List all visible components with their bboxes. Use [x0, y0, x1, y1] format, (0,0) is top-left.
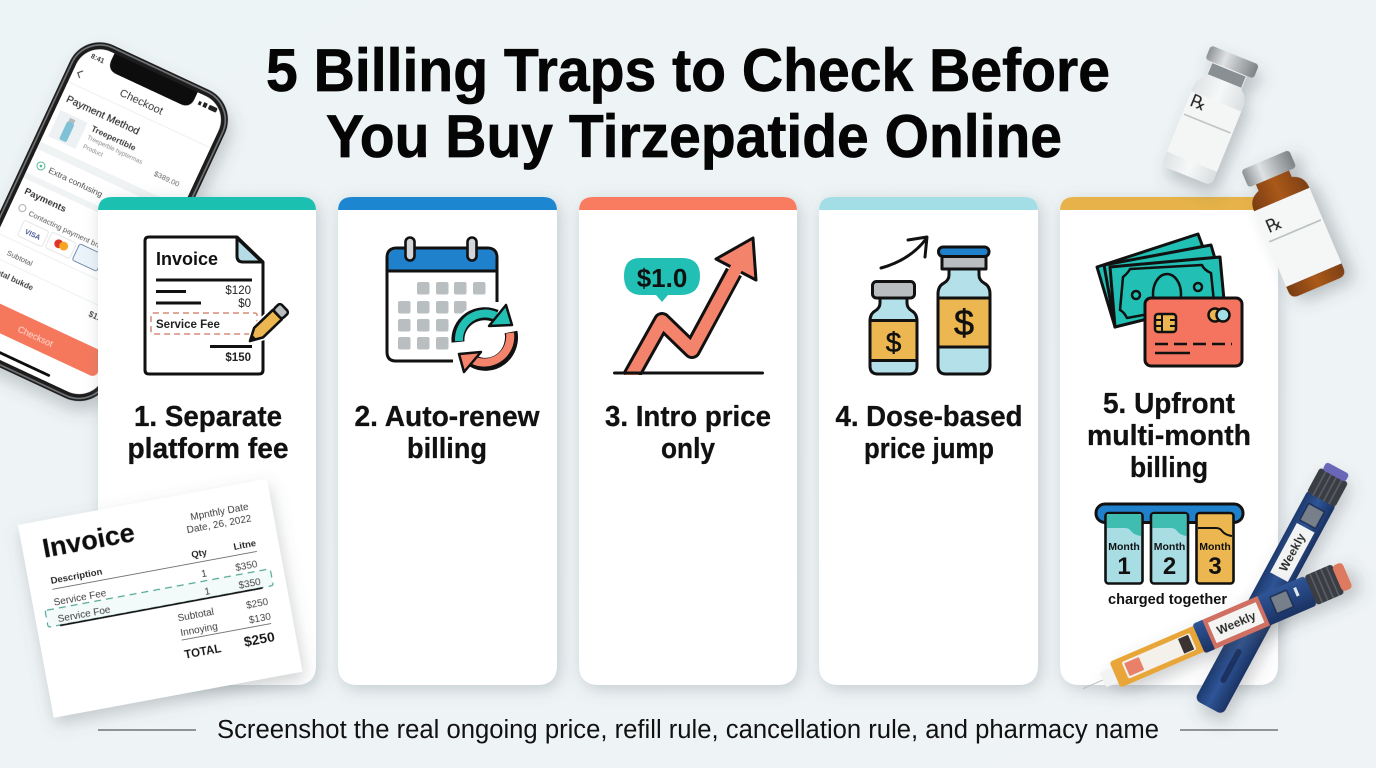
footer note: Screenshot the real ongoing price, refill rule, cancellation rule, and pharmacy name — [217, 716, 1159, 744]
heading: card 3: only — [661, 433, 715, 465]
icon: invoice with pencil: $120 — [225, 285, 251, 297]
heading: card 4: price jump — [864, 433, 994, 465]
phone: checkout screen: Contacting payment brands — [27, 209, 114, 256]
icon: three months charged together — [1096, 504, 1243, 608]
month 2: 2 — [1163, 553, 1176, 580]
vial: clear Rx: ℞ — [1187, 90, 1210, 115]
phone: checkout screen: Payments — [23, 186, 68, 215]
icon: small and large vials — [870, 237, 990, 374]
large vial: $ — [954, 302, 974, 343]
invoice paper — [18, 479, 302, 718]
heading: card 1: platform fee — [128, 433, 288, 465]
pen label: Weekly — [1215, 608, 1258, 638]
title: You Buy Tirzepatide Online — [326, 103, 1062, 170]
icon: invoice with pencil: $150 — [225, 352, 251, 364]
icon: cash and credit card — [1097, 234, 1242, 366]
credit card — [1145, 298, 1242, 366]
invoice paper: $130 — [248, 611, 272, 626]
phone: checkout screen: Extra confusing — [47, 165, 105, 199]
icon: pencil — [245, 303, 289, 346]
icon: rising price arrow — [600, 238, 775, 389]
phone: checkout screen: VISA — [23, 229, 41, 242]
invoice paper: $350 — [238, 577, 262, 592]
heading: card 3: 3. Intro price — [605, 401, 771, 433]
vial: amber Rx: ℞ — [1263, 212, 1285, 237]
phone: checkout screen: Payment Method — [64, 93, 141, 138]
invoice paper: $250 — [245, 597, 270, 612]
invoice paper: Subtotal — [177, 607, 215, 624]
pen: yellow and coral weekly injector — [1076, 560, 1354, 703]
month 3: Month — [1199, 541, 1231, 553]
month 1: Month — [1108, 541, 1140, 553]
phone: checkout screen: Checkoot — [118, 87, 165, 118]
invoice paper: 1 — [204, 586, 212, 598]
month 3: 3 — [1208, 553, 1222, 580]
icon: invoice with pencil: Service Fee — [156, 319, 220, 331]
heading: card 1 — [128, 401, 288, 465]
title: 5 Billing Traps to Check Before — [266, 37, 1110, 104]
month 2 — [1151, 513, 1188, 584]
title — [266, 37, 1110, 170]
heading: card 2 — [354, 401, 540, 465]
caption: charged together — [1108, 592, 1227, 608]
vial: amber Rx — [1237, 148, 1347, 299]
price bubble — [624, 258, 700, 302]
pen: blue weekly injector — [1195, 460, 1352, 715]
heading: card 5 — [1087, 388, 1251, 484]
invoice paper: 1 — [200, 568, 208, 580]
heading: card 5: billing — [1130, 452, 1208, 484]
invoice paper: Litne — [233, 538, 257, 553]
phone: checkout screen — [0, 31, 239, 412]
price bubble: $1.0 — [637, 263, 687, 293]
panel: card 5 — [1060, 197, 1278, 685]
month 3 — [1196, 513, 1234, 584]
panel: card 2 — [338, 197, 557, 685]
heading: card 4: 4. Dose-based — [836, 401, 1022, 433]
invoice paper: Service Foe — [57, 605, 112, 625]
pen label — [1270, 523, 1314, 582]
vial: clear Rx — [1161, 45, 1260, 186]
heading: card 2: 2. Auto-renew — [354, 401, 540, 433]
heading: card 2: billing — [407, 433, 487, 465]
phone: checkout screen: Product — [82, 143, 104, 159]
phone: checkout screen: Subtotal — [5, 248, 34, 268]
panel: card 4 — [819, 197, 1038, 685]
invoice paper: Innoying — [180, 621, 219, 639]
invoice paper: TOTAL — [184, 643, 222, 662]
invoice paper: Mpnthly Date — [190, 502, 250, 523]
phone: checkout screen: 8:41 — [89, 53, 105, 65]
panel: card 1 — [98, 197, 316, 685]
icon: invoice with pencil: $0 — [238, 298, 251, 310]
invoice paper: Description — [50, 566, 103, 587]
phone: checkout screen: $1. — [87, 310, 101, 322]
phone: checkout screen: Treepertible — [90, 123, 138, 153]
heading: card 1: 1. Separate — [134, 401, 282, 433]
invoice paper: $250 — [242, 628, 276, 650]
heading: card 5: multi-month — [1087, 420, 1251, 452]
month 1: 1 — [1117, 553, 1131, 580]
phone: checkout screen: $389.00 — [153, 169, 181, 189]
invoice paper: Service Fee — [53, 588, 108, 609]
panel: card 3 — [579, 197, 797, 685]
pen label — [1208, 602, 1264, 643]
invoice paper: Date, 26, 2022 — [186, 513, 253, 536]
heading: card 4 — [836, 401, 1022, 465]
invoice paper: Invoice — [40, 517, 137, 564]
pen label: Weekly — [1276, 531, 1308, 574]
phone: checkout screen: Checksot — [16, 324, 55, 349]
month 2: Month — [1154, 541, 1185, 553]
phone: checkout screen: Treeperble hyptermas — [86, 134, 143, 166]
small vial: $ — [886, 327, 902, 358]
month 1 — [1106, 513, 1142, 584]
invoice paper: Qty — [190, 547, 209, 561]
invoice paper: $350 — [235, 559, 259, 574]
icon: invoice with pencil — [145, 237, 289, 374]
icon: calendar with renew arrows — [387, 238, 518, 372]
heading: card 5: 5. Upfront — [1103, 388, 1235, 420]
heading: card 3 — [605, 401, 771, 465]
icon: invoice with pencil: Invoice — [156, 249, 218, 269]
